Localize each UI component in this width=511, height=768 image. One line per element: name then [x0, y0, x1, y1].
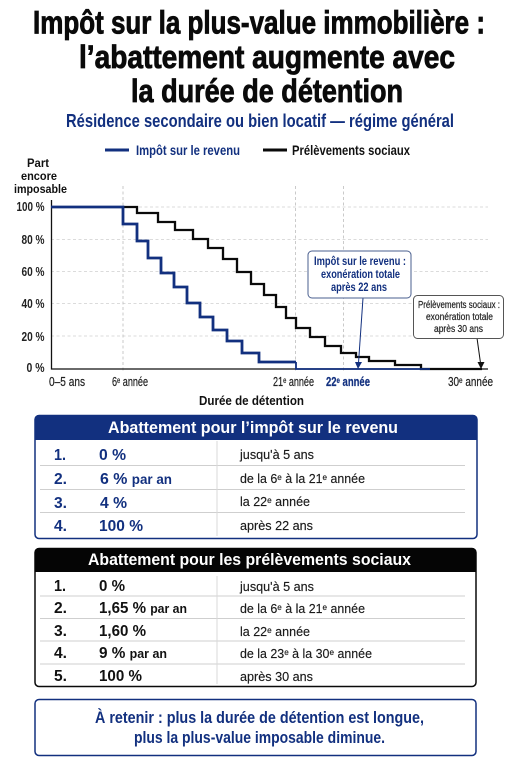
title	[33, 4, 485, 109]
rows	[54, 578, 187, 685]
takeaway box: À retenir : plus la durée de détention est longue,	[95, 708, 424, 727]
y axis labels: 60 %	[22, 265, 44, 279]
panel: abattement impôt sur le revenu: après 22 ans	[240, 518, 313, 533]
panel: abattement prélèvements sociaux: e	[329, 647, 334, 657]
panel: abattement impôt sur le revenu: à la 21	[282, 471, 323, 486]
panel heading: Abattement pour l’impôt sur le revenu	[108, 418, 398, 437]
series: impôt sur le revenu	[51, 207, 296, 362]
panel: abattement impôt sur le revenu: e	[277, 472, 282, 482]
rows: 100 %	[99, 518, 143, 535]
x axis labels: e	[283, 376, 287, 385]
rows	[54, 447, 172, 535]
panel: abattement prélèvements sociaux: année	[272, 624, 310, 639]
panel: abattement impôt sur le revenu: année	[272, 494, 310, 509]
x axis labels: année	[286, 375, 314, 389]
x axis labels: année	[340, 375, 370, 389]
x axis title: Durée de détention	[199, 393, 304, 408]
legend: Impôt sur le revenu	[136, 142, 240, 158]
panel: abattement impôt sur le revenu	[35, 415, 477, 538]
legend	[105, 142, 410, 158]
panel: abattement prélèvements sociaux: e	[267, 625, 272, 635]
panel: abattement prélèvements sociaux: année	[334, 646, 372, 661]
panel header	[35, 415, 477, 440]
callout: impôt sur le revenu: exonération totale	[321, 269, 400, 281]
callout: prélèvements sociaux: après 30 ans	[434, 324, 483, 335]
rows: 2.	[54, 471, 67, 488]
x axis labels: année	[463, 375, 493, 389]
callout: impôt sur le revenu	[308, 251, 411, 369]
rows: 1.	[54, 578, 66, 595]
y axis labels	[16, 200, 44, 375]
rows: 4.	[54, 518, 67, 535]
rows: 1.	[54, 447, 66, 464]
rows: 1,65 % par an	[99, 600, 187, 617]
panel: abattement prélèvements sociaux: année	[327, 601, 365, 616]
rows: 3.	[54, 623, 67, 640]
y axis labels: 40 %	[22, 297, 44, 311]
y axis labels: 0 %	[26, 361, 44, 375]
callout: impôt sur le revenu: après 22 ans	[331, 282, 387, 294]
panel: abattement prélèvements sociaux: la 22	[240, 624, 268, 639]
x axis labels: 21	[273, 375, 287, 389]
rows: 5.	[54, 668, 67, 685]
title: la durée de détention	[131, 73, 403, 109]
panel: abattement impôt sur le revenu: e	[267, 495, 272, 505]
panel: abattement prélèvements sociaux: e	[323, 602, 327, 612]
rows: 0 %	[99, 447, 126, 464]
x axis labels: 30	[448, 375, 462, 389]
panel header	[35, 548, 476, 572]
panel: abattement prélèvements sociaux: jusqu'à 5 ans	[239, 579, 314, 594]
y axis labels: 20 %	[22, 330, 44, 344]
rows: 0 %	[99, 578, 125, 595]
y axis labels: 80 %	[22, 233, 44, 247]
y axis labels: 100 %	[16, 200, 44, 214]
rows: 4.	[54, 645, 67, 662]
panel: abattement impôt sur le revenu: jusqu'à 5 ans	[239, 447, 314, 462]
panel: abattement prélèvements sociaux	[35, 548, 476, 686]
axes	[52, 200, 488, 369]
y axis title: encore	[21, 169, 57, 183]
y axis title: Part	[27, 156, 49, 170]
panel: abattement prélèvements sociaux: e	[284, 647, 289, 657]
panel: abattement prélèvements sociaux: de la 23	[240, 646, 286, 661]
panel: abattement impôt sur le revenu: la 22	[240, 494, 268, 509]
rows: 4 %	[100, 495, 127, 512]
panel: abattement impôt sur le revenu: de la 6	[240, 471, 279, 486]
rows: 3.	[54, 495, 67, 512]
panel heading: Abattement pour les prélèvements sociaux	[88, 550, 411, 569]
series: prélèvements sociaux	[123, 207, 482, 369]
y axis title	[14, 156, 67, 196]
takeaway box: plus la plus-value imposable diminue.	[134, 728, 385, 747]
x axis labels: 22	[326, 375, 340, 389]
rows: 6 % par an	[100, 471, 172, 488]
rows: 1,60 %	[99, 623, 146, 640]
x axis labels: 6	[112, 375, 119, 389]
panel: abattement impôt sur le revenu: année	[327, 471, 365, 486]
x axis labels: année	[120, 375, 148, 389]
panel: abattement prélèvements sociaux: e	[277, 602, 282, 612]
line chart	[16, 186, 493, 408]
x axis labels: e	[337, 376, 340, 385]
callout: impôt sur le revenu: Impôt sur le revenu :	[314, 256, 406, 268]
panel: abattement prélèvements sociaux: après 30 ans	[240, 669, 313, 684]
callout: prélèvements sociaux: exonération totale	[426, 312, 493, 323]
rows: 2.	[54, 600, 67, 617]
panel: abattement prélèvements sociaux: à la 21	[282, 601, 323, 616]
title: l’abattement augmente avec	[79, 39, 455, 75]
panel: abattement impôt sur le revenu: e	[323, 472, 327, 482]
panel: abattement prélèvements sociaux: de la 6	[240, 601, 279, 616]
takeaway box	[35, 700, 476, 756]
rows: 9 % par an	[99, 645, 167, 662]
y axis title: imposable	[14, 182, 67, 196]
series end: impôt sur le revenu at zero	[296, 362, 430, 369]
legend: Prélèvements sociaux	[292, 142, 410, 158]
x axis labels: e	[117, 376, 121, 385]
x axis labels: 0–5 ans	[49, 375, 85, 389]
x axis labels	[49, 375, 493, 389]
callout: prélèvements sociaux	[414, 296, 504, 369]
panel: abattement prélèvements sociaux: à la 30	[289, 646, 329, 661]
x axis labels: e	[459, 376, 463, 385]
rows: 100 %	[99, 668, 142, 685]
